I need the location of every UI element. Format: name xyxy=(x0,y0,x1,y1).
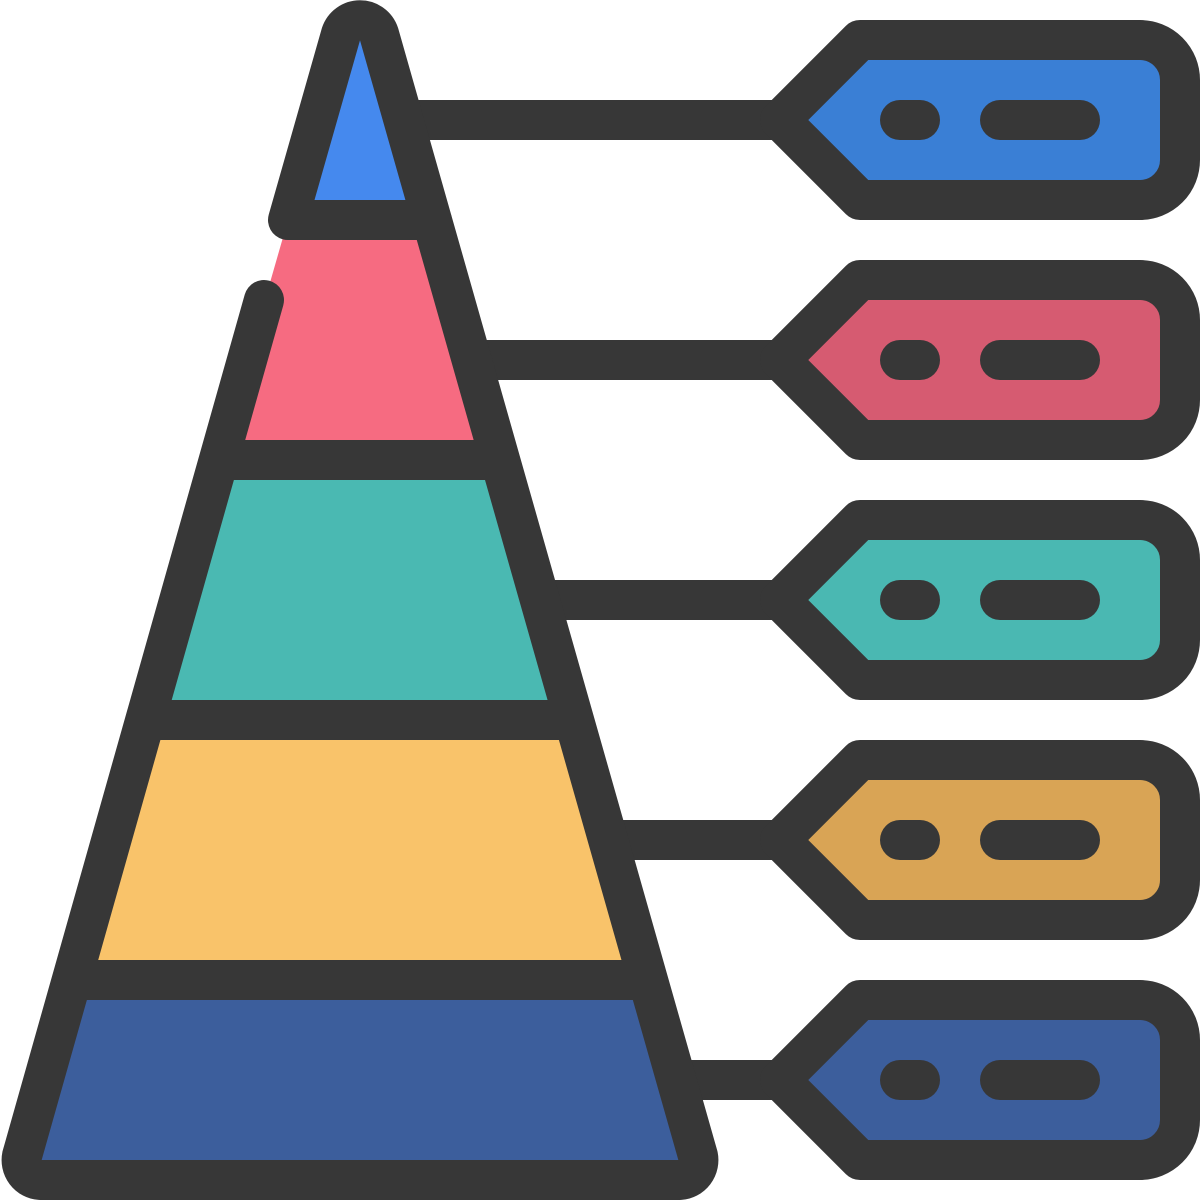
tag 5 xyxy=(780,1000,1180,1160)
pyramid outline xyxy=(22,20,698,1180)
tag 2 xyxy=(780,280,1180,440)
tag 1 xyxy=(780,40,1180,200)
pyramid layers xyxy=(14,20,706,1180)
tag 4 xyxy=(780,760,1180,920)
connectors xyxy=(400,120,790,1080)
tag 3 xyxy=(780,520,1180,680)
